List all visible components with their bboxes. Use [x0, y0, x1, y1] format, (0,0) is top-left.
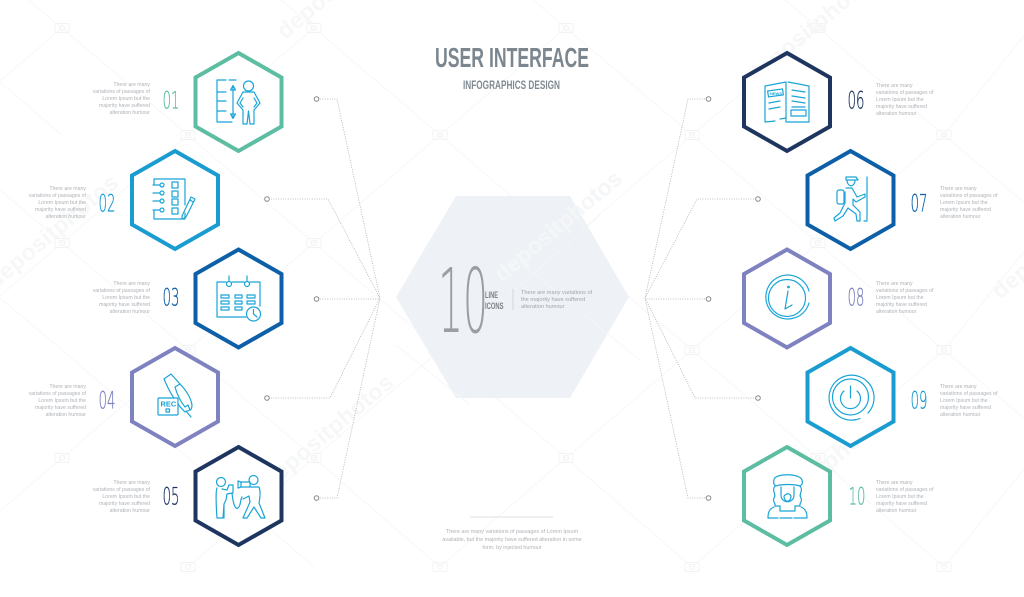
item 10 [744, 447, 934, 545]
number 02: 02 [99, 189, 115, 218]
icon: phone recording: REC [160, 400, 177, 408]
text 04: majority have suffered [35, 405, 86, 411]
item 02 [29, 151, 218, 249]
central description: alteration humour [521, 304, 565, 310]
text 10: Lorem Ipsum but the [876, 494, 924, 500]
text 05: variations of passages of [93, 487, 151, 493]
text 05: alteration humour [110, 508, 150, 514]
item 03 [93, 250, 282, 348]
icon: phone recording [158, 374, 192, 417]
text 04: There are many [49, 384, 86, 390]
text 04: variations of passages of [29, 391, 87, 397]
text 02: alteration humour [46, 214, 86, 220]
text 05: Lorem Ipsum but the [102, 494, 150, 500]
text 08: alteration humour [876, 309, 917, 315]
text 01: Lorem Ipsum but the [102, 96, 150, 102]
bottom note: There are many variations of passages of Lorem Ipsum [446, 529, 579, 535]
text 09: Lorem Ipsum but the [940, 398, 988, 404]
item 04 [29, 348, 218, 446]
text 02: Lorem Ipsum but the [38, 200, 86, 206]
big number 10: 10 [438, 250, 488, 354]
panel: central hexagon [396, 165, 640, 405]
text 06: alteration humour [876, 111, 917, 117]
text 02: majority have suffered [35, 207, 86, 213]
text 03: Lorem Ipsum but the [102, 295, 150, 301]
number 08: 08 [848, 283, 864, 312]
text 02: There are many [49, 186, 86, 192]
central description: the majority have suffered [521, 297, 585, 303]
text 08: majority have suffered [876, 302, 927, 308]
icon: height measure person [217, 80, 260, 124]
bottom note [442, 517, 582, 551]
text 07: There are many [940, 186, 977, 192]
text 04: alteration humour [46, 412, 86, 418]
item 05 [93, 447, 282, 545]
item 08 [744, 250, 934, 348]
text 07: Lorem Ipsum but the [940, 200, 988, 206]
number 07: 07 [911, 189, 927, 218]
number 09: 09 [911, 386, 927, 415]
text 10: variations of passages of [876, 487, 934, 493]
icon: information [766, 275, 809, 319]
icon: checklist and pencil [153, 179, 195, 219]
text 01: There are many [113, 82, 150, 88]
text 08: There are many [876, 281, 913, 287]
number 01: 01 [163, 86, 179, 115]
bottom note: form, by injected humour [482, 545, 542, 551]
text 09: There are many [940, 384, 977, 390]
title: USER INTERFACE [435, 42, 589, 73]
subtitle: INFOGRAPHICS DESIGN [463, 78, 560, 92]
text 09: majority have suffered [940, 405, 991, 411]
number 05: 05 [163, 482, 179, 511]
text 05: There are many [113, 480, 150, 486]
text 01: variations of passages of [93, 89, 151, 95]
text 08: variations of passages of [876, 288, 934, 294]
number 10: 10 [849, 482, 865, 511]
text 10: There are many [876, 480, 913, 486]
text 07: variations of passages of [940, 193, 998, 199]
text 01: majority have suffered [99, 103, 150, 109]
text 06: Lorem Ipsum but the [876, 97, 924, 103]
text 03: majority have suffered [99, 302, 150, 308]
number 03: 03 [163, 283, 179, 312]
item 07 [808, 151, 998, 249]
text 06: There are many [876, 83, 913, 89]
text 07: alteration humour [940, 214, 981, 220]
icon: calendar with clock [217, 276, 260, 321]
text 03: There are many [113, 281, 150, 287]
panel: central hexagon: ICONS [485, 301, 504, 312]
title [435, 42, 589, 92]
item 06 [744, 53, 934, 151]
central description: There are many variations of [521, 290, 593, 296]
icon: person with fur hat [768, 475, 807, 518]
text 08: Lorem Ipsum but the [876, 295, 924, 301]
icon: power button [829, 375, 874, 420]
text: depositphotos [752, 404, 894, 529]
text 03: alteration humour [110, 309, 150, 315]
text 09: alteration humour [940, 412, 981, 418]
text 01: alteration humour [110, 110, 150, 116]
text 04: Lorem Ipsum but the [38, 398, 86, 404]
panel: central hexagon: depositphotos [489, 165, 627, 287]
text 07: majority have suffered [940, 207, 991, 213]
text 06: variations of passages of [876, 90, 934, 96]
text 10: alteration humour [876, 508, 917, 514]
bottom note: available, but the majority have suffered alteration in some [442, 537, 582, 543]
text 05: majority have suffered [99, 501, 150, 507]
line icons label: LINE [485, 290, 498, 301]
icon: hiker [834, 177, 867, 221]
item 01 [93, 53, 282, 151]
icon: newspaper: NEWS [770, 91, 782, 96]
left connector lines [265, 97, 380, 500]
icon: newspaper [765, 82, 809, 122]
text 02: variations of passages of [29, 193, 87, 199]
text 10: majority have suffered [876, 501, 927, 507]
right connector lines [645, 97, 760, 500]
text 09: variations of passages of [940, 391, 998, 397]
text 03: variations of passages of [93, 288, 151, 294]
number 06: 06 [848, 86, 864, 115]
text 06: majority have suffered [876, 104, 927, 110]
item 09 [808, 348, 998, 446]
number 04: 04 [99, 386, 115, 415]
icon: reporter and cameraman [216, 476, 265, 518]
text: depositphotos [257, 369, 399, 494]
